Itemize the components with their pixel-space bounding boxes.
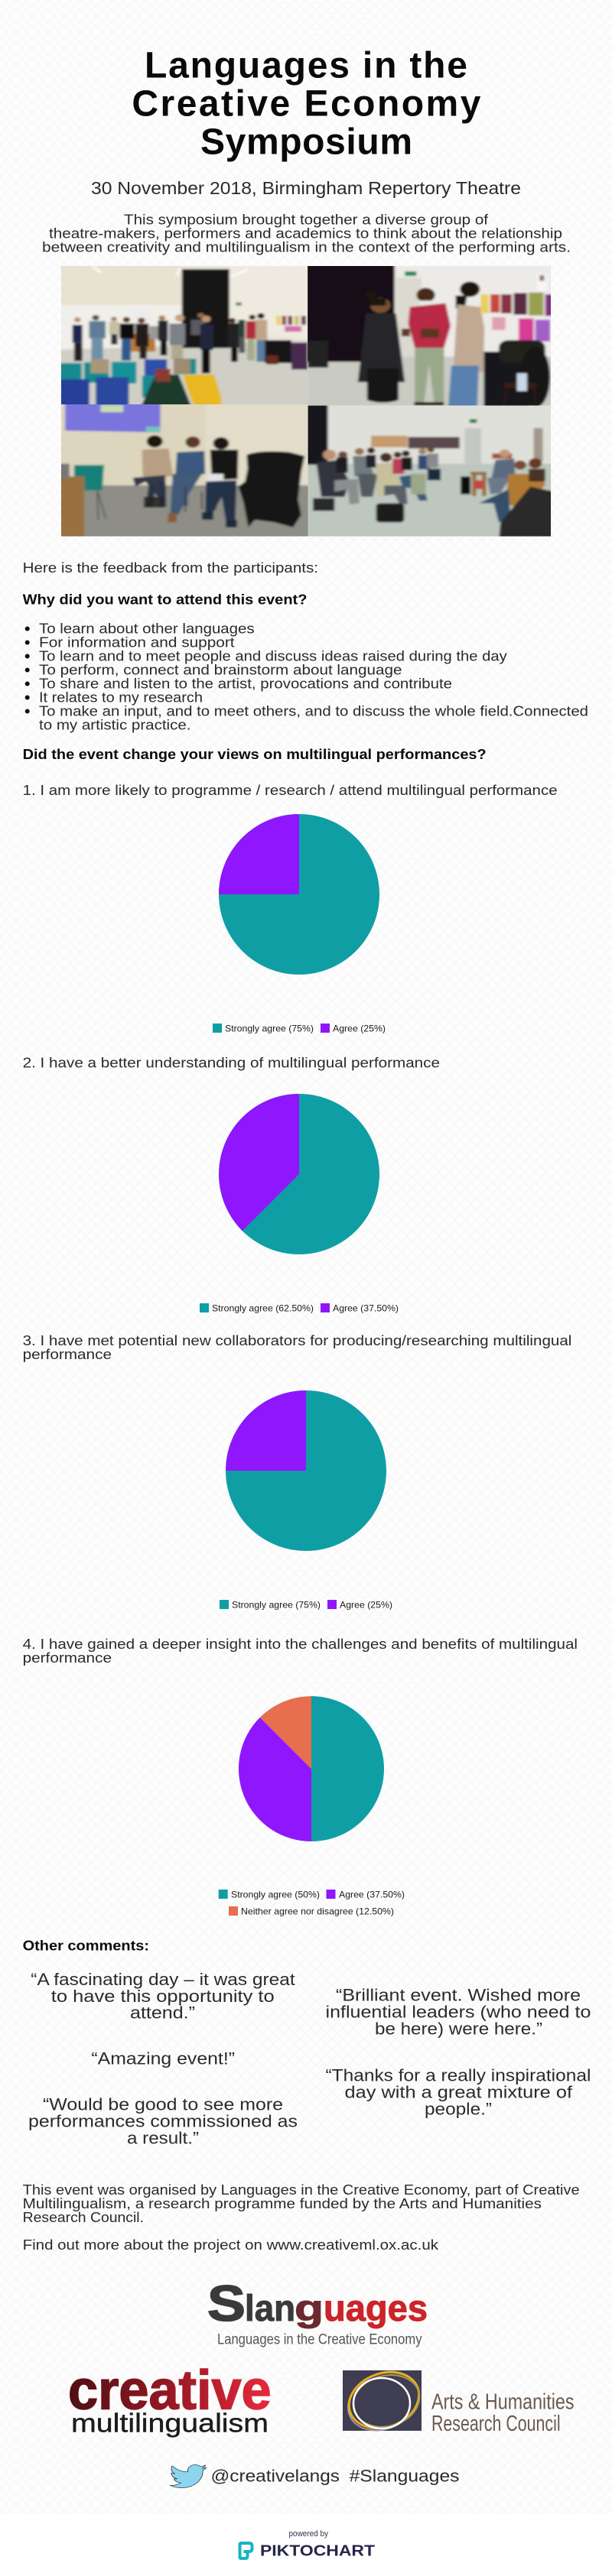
- legend: question 3: Agree (25%): [340, 1600, 392, 1611]
- photo: audience listening to speaker: [303, 403, 555, 540]
- social handles: #Slanguages: [350, 2467, 459, 2486]
- quotes: left column: to have this opportunity to: [51, 1987, 275, 2006]
- footer: powered by Piktochart: [240, 2529, 375, 2559]
- logo: Slanguages: [207, 2275, 428, 2348]
- legend: question 4: Agree (37.50%): [339, 1890, 405, 1900]
- quotes: left column: “Amazing event!”: [91, 2049, 235, 2068]
- intro text: between creativity and multilingualism in the context of the performing arts.: [42, 239, 571, 255]
- legend: question 1: Strongly agree (75%): [225, 1024, 314, 1034]
- legend: question 4: Neither agree nor disagree (12.50%): [241, 1906, 394, 1917]
- legend: question 3: [220, 1600, 392, 1611]
- question 4: 4. I have gained a deeper insight into the challenges and benefits of multilingual: [23, 1637, 578, 1652]
- logo: creative multilingualism: creative: [68, 2360, 272, 2422]
- legend: question 2: Strongly agree (62.50%): [212, 1303, 314, 1314]
- heading: did the event change views: Did the event change your views on multilingual performances?: [23, 747, 487, 762]
- footer: powered by Piktochart: PIKTOCHART: [260, 2542, 375, 2559]
- bullet list: reasons for attending: To make an input, and to meet others, and to discuss the whole field.Connected: [39, 703, 588, 719]
- icon: Piktochart mark: [240, 2543, 252, 2558]
- organiser text: Find out more about the project on www.creativeml.ox.ac.uk: [23, 2237, 439, 2253]
- bullet list: reasons for attending: To learn and to meet people and discuss ideas raised during the day: [39, 648, 507, 663]
- pie chart: question 3: [226, 1390, 386, 1551]
- subtitle: date and venue: 30 November 2018, Birmingham Repertory Theatre: [91, 178, 521, 198]
- photo: networking in rehearsal room: [56, 262, 313, 407]
- intro text: This symposium brought together a diverse group of: [124, 212, 489, 227]
- bullet list: reasons for attending: To share and listen to the artist, provocations and contribute: [39, 676, 452, 691]
- heading: other comments: Other comments:: [23, 1938, 149, 1954]
- bullet list: reasons for attending: For information and support: [39, 634, 235, 650]
- question 3: 3. I have met potential new collaborators for producing/researching multilingual: [23, 1333, 571, 1348]
- photo: three people talking: [303, 262, 555, 409]
- question 3: [23, 1333, 571, 1362]
- icon: twitter bird: [170, 2464, 207, 2488]
- title: Languages in the: [145, 46, 467, 86]
- quotes: left column: a result.”: [127, 2128, 199, 2147]
- bullet list: reasons for attending: to my artistic practice.: [39, 717, 191, 732]
- intro text: [42, 212, 571, 255]
- logo: Slanguages: lan: [245, 2289, 295, 2329]
- title: Symposium: [200, 122, 412, 163]
- question 4: [23, 1637, 578, 1666]
- quotes: left column: attend.”: [130, 2003, 195, 2023]
- quotes: right column: “Brilliant event. Wished more: [336, 1986, 581, 2005]
- intro text: theatre-makers, performers and academics to think about the relationship: [49, 225, 562, 241]
- organiser text: Multilingualism, a research programme funded by the Arts and Humanities: [23, 2196, 542, 2211]
- footer: powered by Piktochart: powered by: [289, 2529, 328, 2539]
- quotes: right column: day with a great mixture of: [344, 2083, 573, 2102]
- question 1: 1. I am more likely to programme / research / attend multilingual performance: [23, 783, 558, 798]
- logo: Slanguages: uages: [324, 2289, 428, 2329]
- feedback intro line: Here is the feedback from the participants:: [23, 560, 318, 576]
- pie chart: question 1: [219, 814, 379, 975]
- photo collage: [56, 262, 555, 540]
- title: Creative Economy: [132, 84, 481, 125]
- bullet list: reasons for attending: To learn about other languages: [39, 621, 255, 636]
- quotes: right column: influential leaders (who need to: [326, 2003, 591, 2022]
- quotes: left column: “Would be good to see more: [43, 2095, 283, 2114]
- organiser text: [23, 2182, 580, 2253]
- logo: Slanguages: Languages in the Creative Economy: [217, 2332, 422, 2348]
- photo: panel seated in front of screen: [56, 401, 313, 540]
- legend: question 2: Agree (37.50%): [333, 1303, 399, 1314]
- quotes: left column: performances commissioned as: [28, 2112, 298, 2131]
- quotes: right column: people.”: [425, 2100, 492, 2119]
- quotes: right column: “Thanks for a really inspirational: [326, 2066, 591, 2085]
- quotes: right column: [326, 1986, 591, 2119]
- social handles: @creativelangs: [211, 2467, 340, 2486]
- question 2: 2. I have a better understanding of multilingual performance: [23, 1056, 440, 1071]
- pie chart: question 4: [239, 1696, 384, 1841]
- logo: Slanguages: g: [295, 2289, 324, 2329]
- title: [132, 46, 481, 163]
- logo: Arts and Humanities Research Council: Arts & Humanities: [431, 2390, 574, 2415]
- quotes: left column: [28, 1970, 298, 2147]
- organiser text: Research Council.: [23, 2210, 144, 2225]
- social handles: [211, 2467, 459, 2486]
- legend: question 4: Strongly agree (50%): [231, 1890, 320, 1900]
- pie chart: question 2: [219, 1094, 379, 1254]
- logo: Slanguages: S: [207, 2275, 246, 2331]
- question 4: performance: [23, 1650, 112, 1666]
- logo: Arts and Humanities Research Council: Research Council: [431, 2412, 561, 2436]
- legend: question 4: [219, 1890, 405, 1917]
- legend: question 2: [200, 1303, 399, 1314]
- question 3: performance: [23, 1347, 112, 1362]
- legend: question 3: Strongly agree (75%): [232, 1600, 321, 1611]
- bullet list: reasons for attending: To perform, connect and brainstorm about language: [39, 662, 402, 677]
- quotes: left column: “A fascinating day – it was great: [31, 1970, 295, 1989]
- heading: why attend: Why did you want to attend this event?: [23, 592, 307, 608]
- bullet list: reasons for attending: It relates to my research: [39, 689, 203, 705]
- bullet list: reasons for attending: [25, 621, 588, 732]
- logo: Arts and Humanities Research Council: [338, 2360, 574, 2441]
- legend: question 1: [213, 1024, 386, 1034]
- quotes: right column: be here) were here.”: [375, 2019, 542, 2038]
- legend: question 1: Agree (25%): [333, 1024, 386, 1034]
- organiser text: This event was organised by Languages in the Creative Economy, part of Creative: [23, 2182, 580, 2198]
- logo: creative multilingualism: multilingualism: [71, 2409, 269, 2438]
